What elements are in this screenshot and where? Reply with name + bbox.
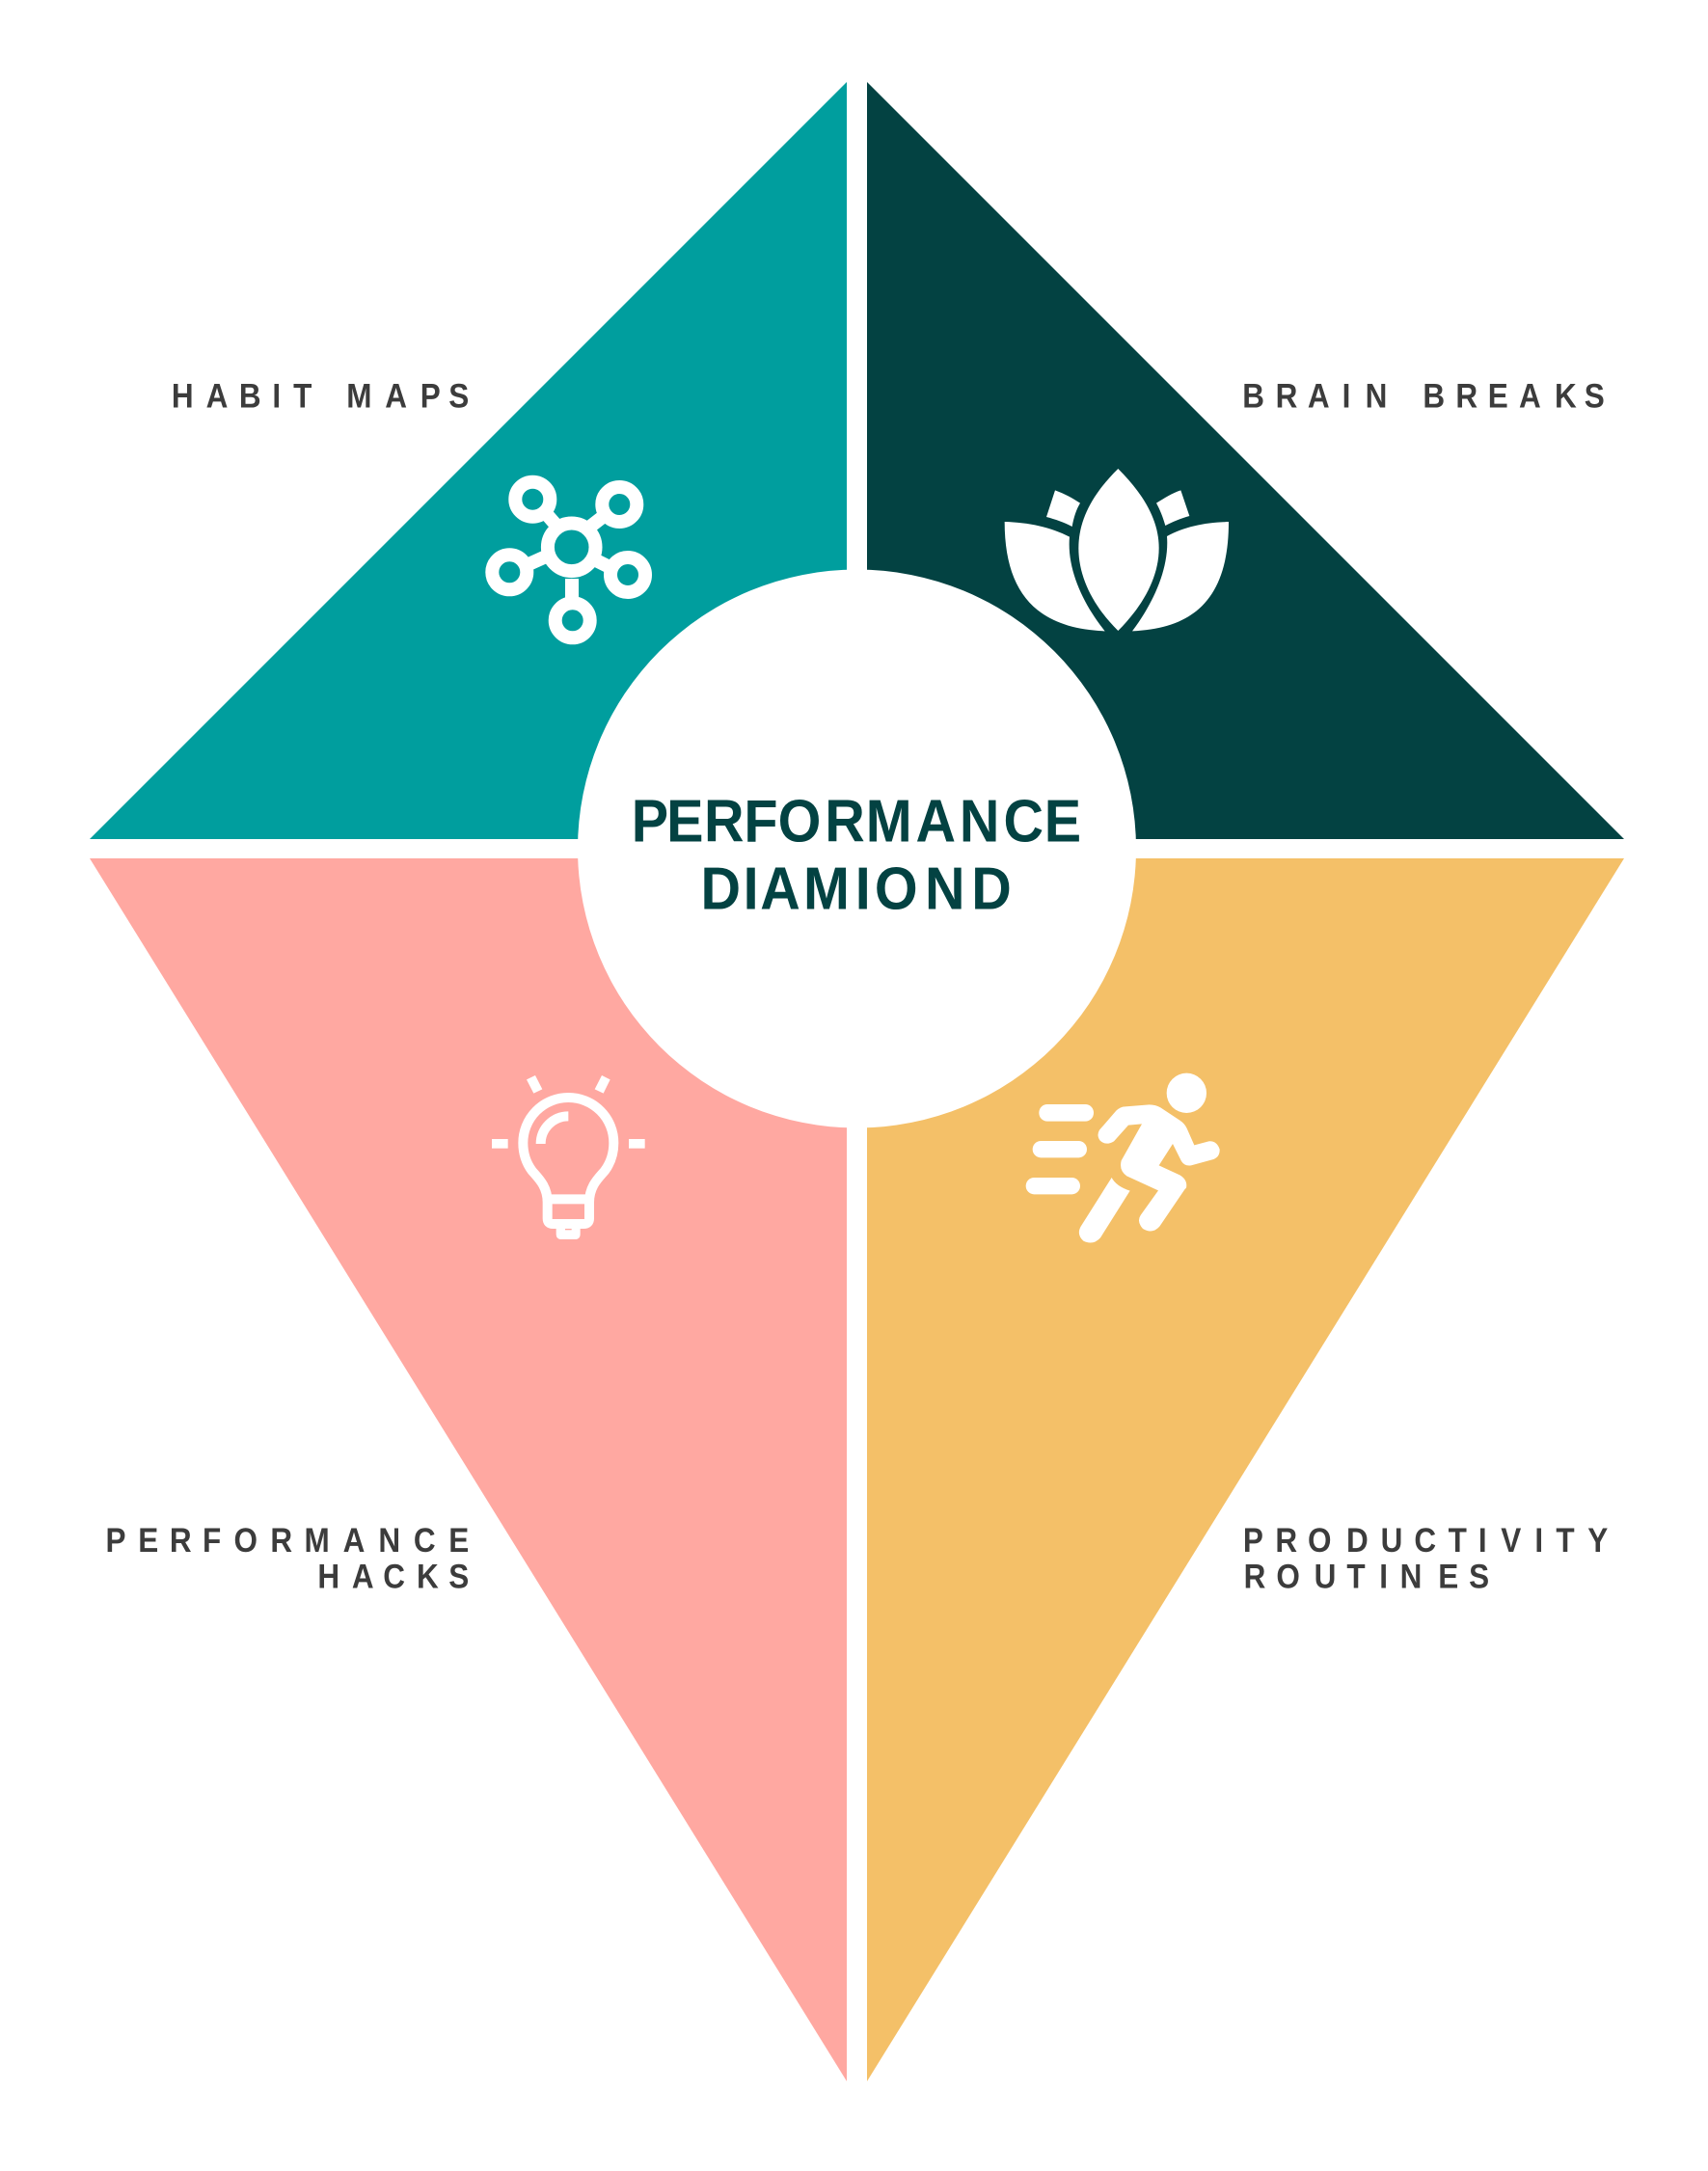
panel: performance hacks triangle — [90, 858, 847, 2081]
panel: brain breaks triangle — [867, 82, 1624, 839]
icon: light bulb — [492, 1075, 645, 1239]
label: performance hacks — [105, 1523, 469, 1596]
icon: lotus flower — [1005, 469, 1229, 631]
label: brain breaks: BRAIN BREAKS — [1242, 378, 1605, 416]
label: productivity routines: PRODUCTIVITY — [1243, 1523, 1608, 1560]
label: productivity routines — [1243, 1523, 1608, 1596]
panel: productivity routines triangle — [867, 858, 1624, 2081]
panel: habit maps triangle — [90, 82, 847, 839]
label: productivity routines: ROUTINES — [1244, 1559, 1489, 1596]
title: DIAMIOND — [701, 855, 1012, 922]
label: performance hacks: HACKS — [317, 1559, 469, 1596]
icon: network nodes — [492, 482, 645, 638]
icon: running person — [1026, 1073, 1220, 1243]
label: performance hacks: PERFORMANCE — [105, 1523, 469, 1560]
title — [632, 787, 1081, 922]
center circle — [578, 569, 1136, 1128]
title: PERFORMANCE — [632, 787, 1081, 855]
label: habit maps: HABIT MAPS — [172, 378, 469, 416]
